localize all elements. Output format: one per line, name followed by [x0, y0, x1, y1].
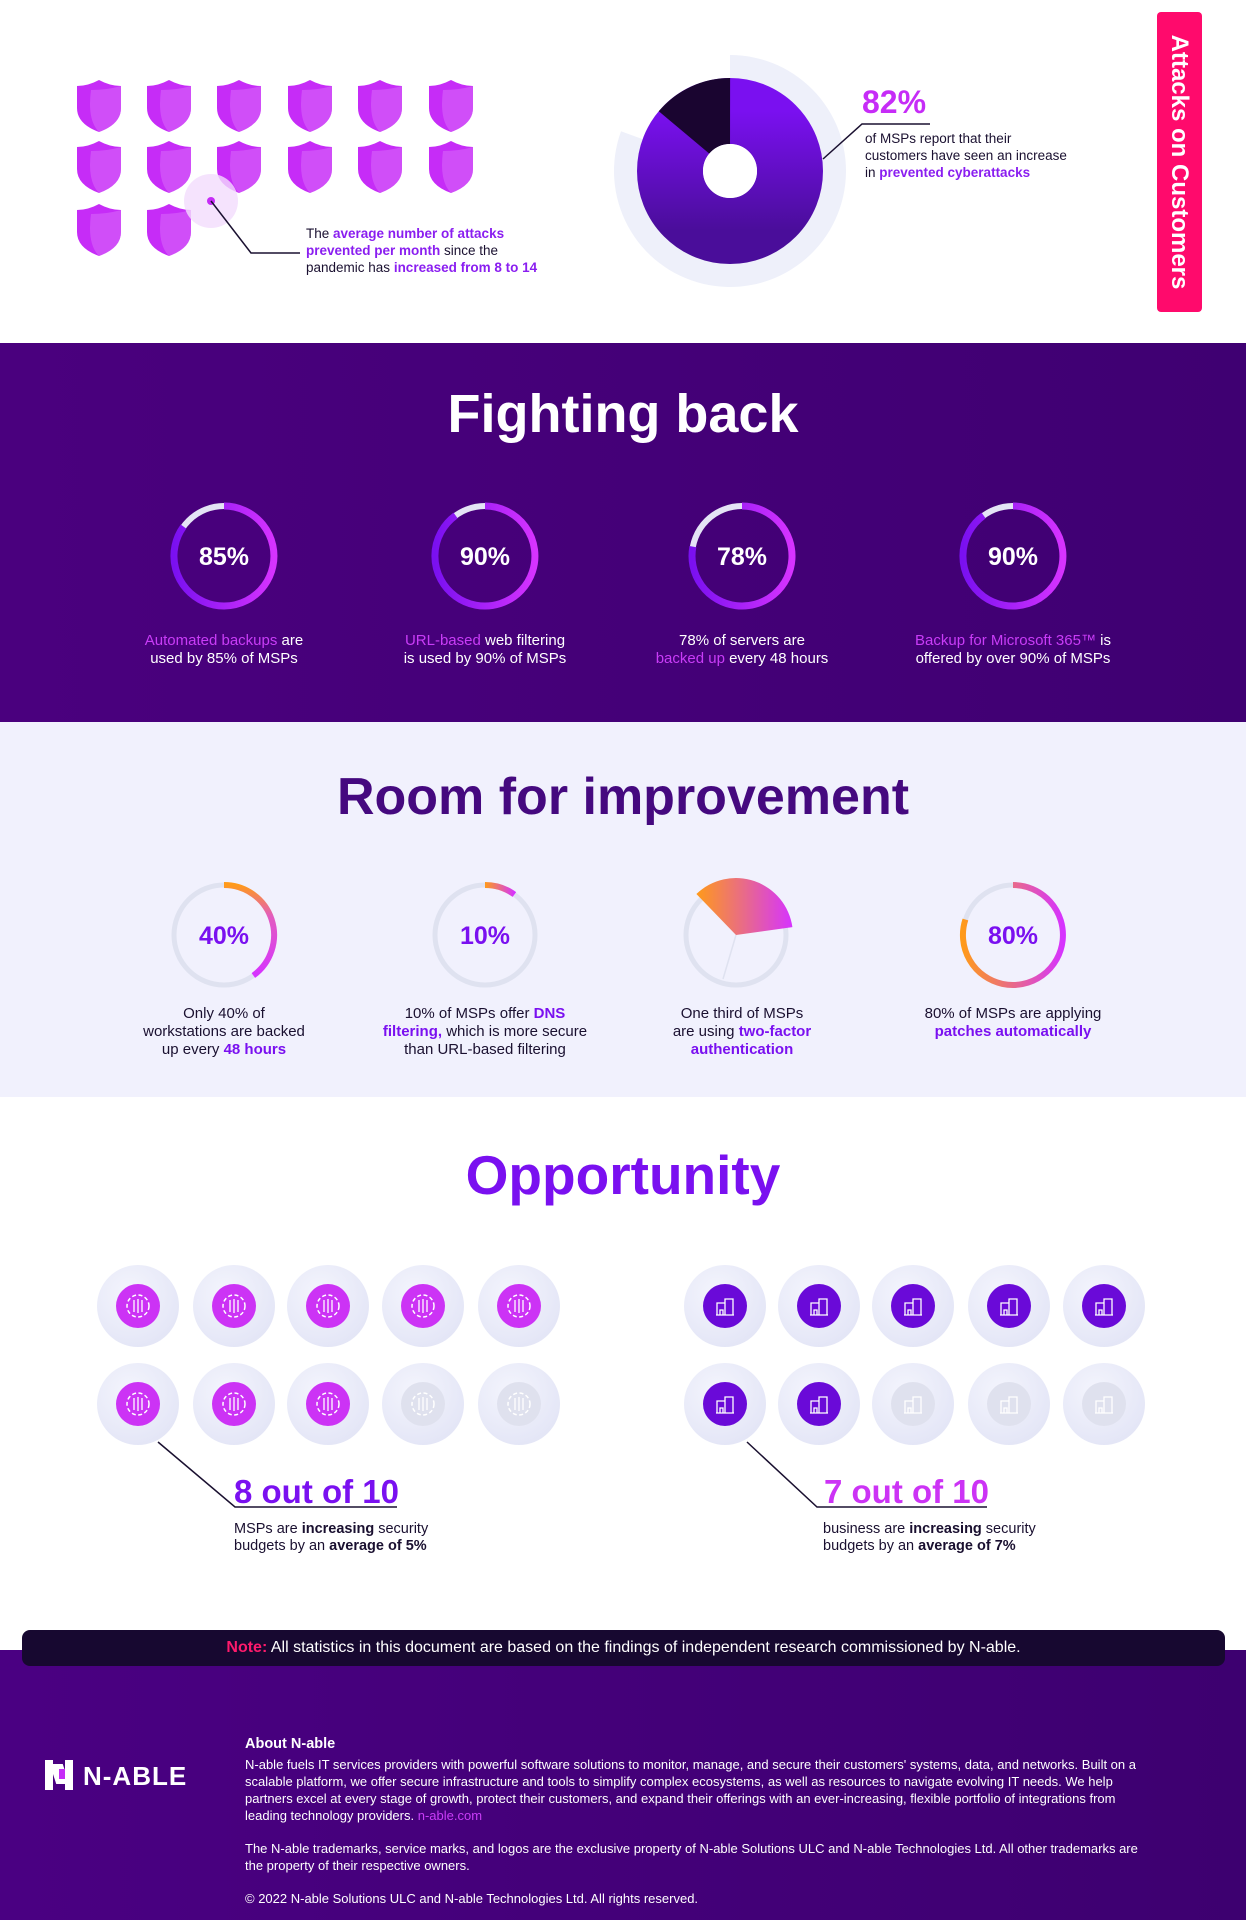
section: room for improvement: than URL-based filtering	[404, 1041, 566, 1058]
captions: workstations are backed	[143, 1023, 305, 1040]
captions	[144, 632, 303, 667]
section: room for improvement: One third of MSPs	[681, 1005, 803, 1022]
shield icons grid	[77, 55, 930, 287]
section: fighting back: URL-based web filtering	[405, 632, 565, 649]
section: fighting back	[0, 343, 1246, 722]
logo: N-able: N-ABLE	[83, 1761, 187, 1791]
text: attacks prevented: The average number of attacks prevented per month since the pandemic has increased from 8 to 14	[306, 226, 537, 275]
rings: 78%	[717, 543, 767, 571]
section: opportunity: budgets by an average of 5%	[234, 1538, 427, 1554]
section: fighting back: backed up every 48 hours	[656, 650, 828, 667]
about text: scalable platform, we offer secure infrastructure and tools to simplify complex ecosystems, as well as resources to navigate evolving IT needs. We help	[245, 1774, 1113, 1789]
section: room for improvement: are using two-factor	[673, 1023, 811, 1040]
section: attacks on customers	[0, 0, 1246, 343]
section: opportunity: budgets by an average of 7%	[823, 1538, 1016, 1554]
title: Room for improvement	[337, 768, 909, 826]
section: fighting back: 78% of servers are	[679, 632, 805, 649]
footer	[0, 1650, 1246, 1920]
captions: Only 40% of	[183, 1005, 265, 1022]
section: opportunity: MSPs are increasing security	[234, 1521, 428, 1537]
title: Fighting back	[448, 384, 798, 444]
about text	[245, 1736, 1138, 1906]
section: room for improvement: 80% of MSPs are applying	[925, 1005, 1101, 1022]
section: fighting back: offered by over 90% of MSPs	[916, 650, 1110, 667]
section: room for improvement: patches automatically	[935, 1023, 1091, 1040]
stat 82%: 82%	[862, 84, 926, 120]
rings: 90%	[460, 543, 510, 571]
section: opportunity	[0, 1097, 1246, 1650]
about text: About N-able	[245, 1736, 335, 1752]
section: attacks on customers: of MSPs report that their customers have seen an increase in prevented cyberattacks	[865, 131, 1067, 180]
captions: Automated backups are	[145, 632, 303, 649]
note bar: Note: All statistics in this document are based on the findings of independent research commissioned by N-able.	[226, 1639, 1021, 1656]
about text: © 2022 N-able Solutions ULC and N-able Technologies Ltd. All rights reserved.	[245, 1891, 698, 1906]
about text: partners excel at every stage of growth, protect their customers, and expand their offerings with an ever-increasing, flexible portfolio of integrations from	[245, 1791, 1115, 1806]
donut chart 82%	[614, 55, 846, 287]
stat: 7 out of 10: 7 out of 10	[824, 1473, 989, 1510]
title: Opportunity	[466, 1144, 780, 1206]
captions	[143, 1005, 305, 1058]
about text: N-able fuels IT services providers with powerful software solutions to monitor, manage, and secure their customers' systems, data, and networks. Built on a	[245, 1757, 1136, 1772]
section: fighting back: is used by 90% of MSPs	[404, 650, 566, 667]
section: room for improvement: 10%	[460, 922, 510, 950]
rings	[170, 502, 1066, 610]
about text: The N-able trademarks, service marks, and logos are the exclusive property of N-able Solutions ULC and N-able Technologies Ltd. All other trademarks are	[245, 1841, 1138, 1856]
section: room for improvement	[0, 722, 1246, 1097]
icon grid left: gears	[97, 1265, 560, 1507]
section: room for improvement: authentication	[691, 1041, 793, 1058]
vertical tab: Attacks on Customers	[1157, 12, 1202, 312]
section: opportunity: business are increasing security	[823, 1521, 1036, 1537]
note bar	[22, 1630, 1225, 1666]
stat: 8 out of 10: 8 out of 10	[234, 1473, 399, 1510]
section: room for improvement: 80%	[988, 922, 1038, 950]
section: room for improvement: 10% of MSPs offer DNS	[405, 1005, 565, 1022]
captions: up every 48 hours	[162, 1041, 286, 1058]
rings: 85%	[199, 543, 249, 571]
section: room for improvement: 40%	[199, 922, 249, 950]
rings: 90%	[988, 543, 1038, 571]
vertical tab: Attacks on Customers: Attacks on Customers	[1166, 35, 1193, 289]
captions: used by 85% of MSPs	[150, 650, 298, 667]
section: fighting back: Backup for Microsoft 365™ is	[915, 632, 1111, 649]
about text: leading technology providers. n-able.com	[245, 1808, 482, 1823]
icon grid right: buildings	[684, 1265, 1145, 1507]
section: room for improvement: filtering, which is more secure	[383, 1023, 587, 1040]
about text: the property of their respective owners.	[245, 1858, 470, 1873]
